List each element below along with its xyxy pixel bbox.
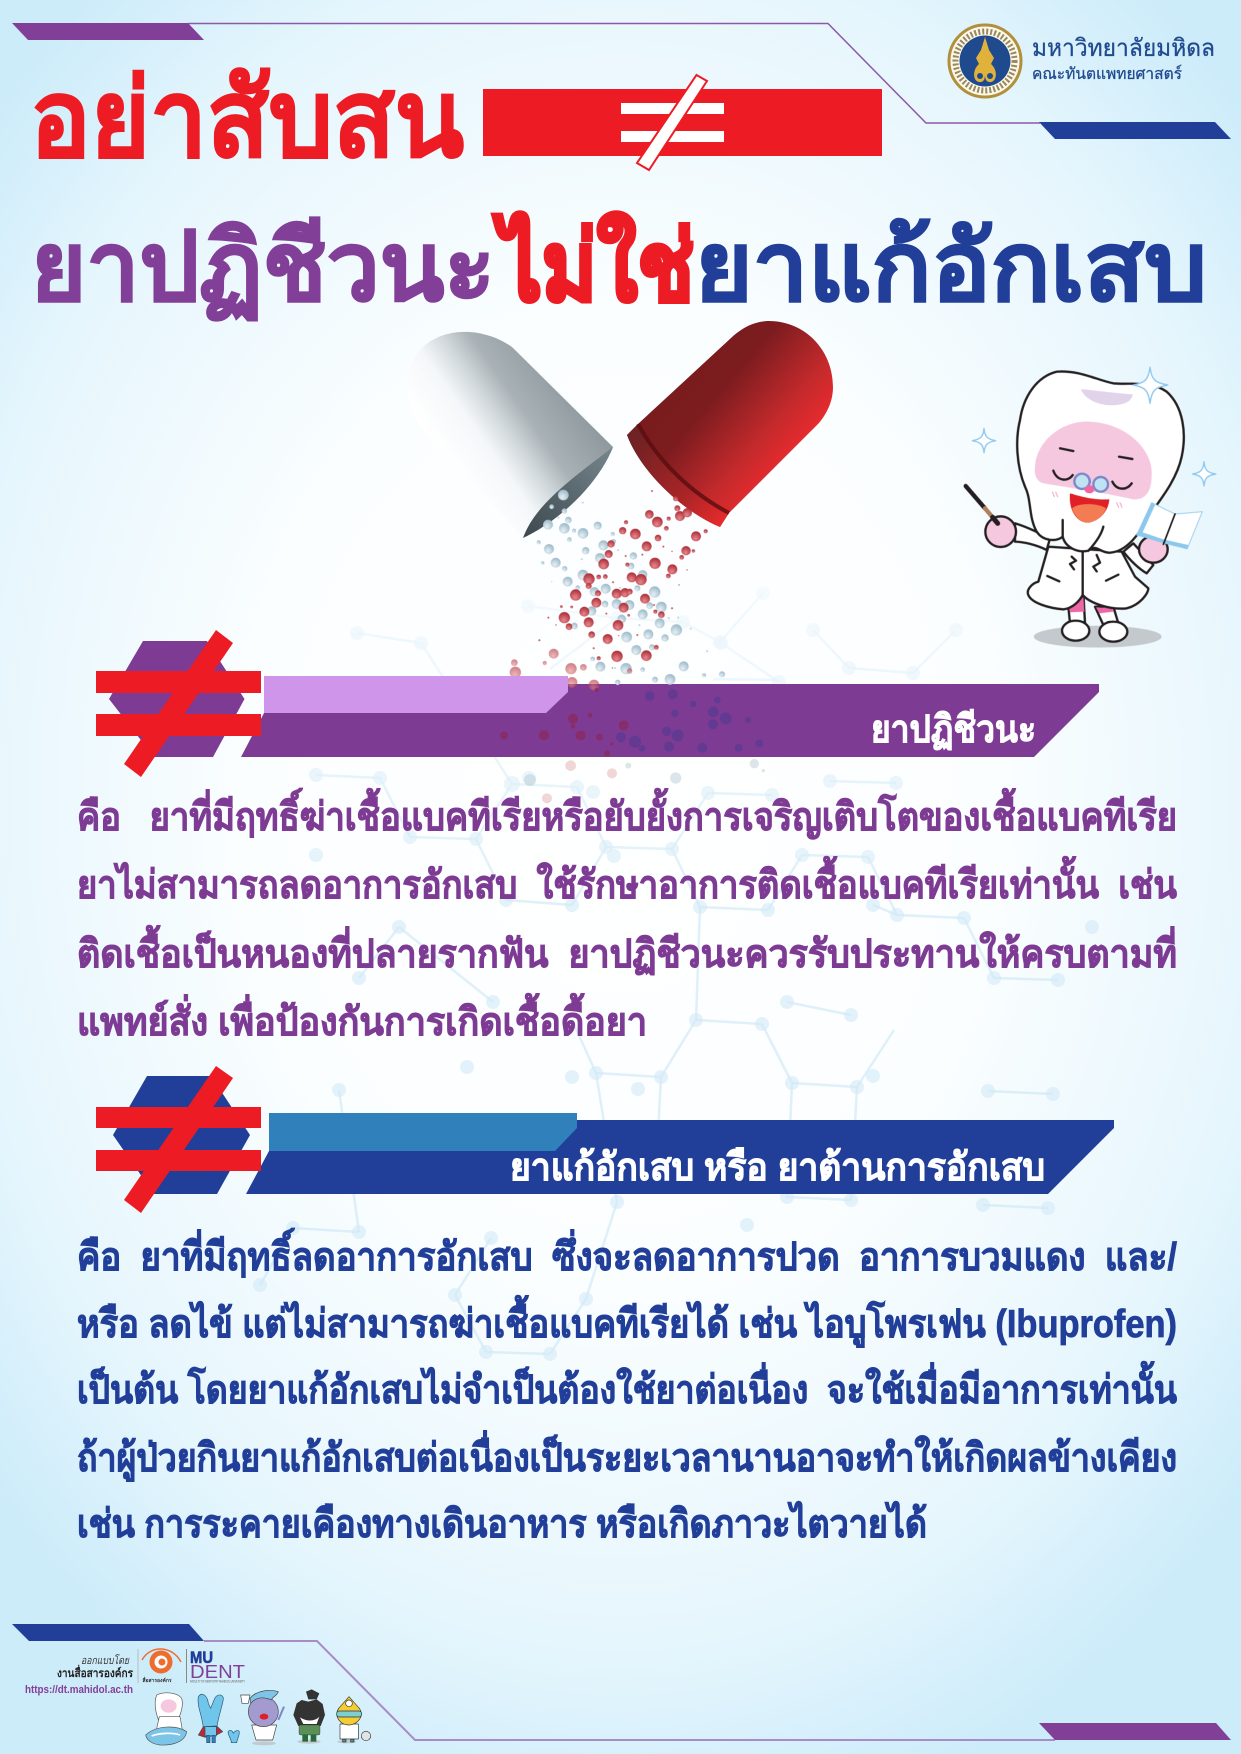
top frame with purple and blue tabs xyxy=(12,23,1231,139)
bottom frame with blue and purple tabs xyxy=(12,1624,1231,1740)
section 1 body text: ติดเชื้อเป็นหนองที่ปลายรากฟัน ยาปฏิชีวนะควรรับประทานให้ครบตามที่ xyxy=(77,925,1177,976)
footer designer credit: https://dt.mahidol.ac.th xyxy=(25,1684,133,1696)
footer logos: FACULTY OF DENTISTRY MAHIDOL UNIVERSITY xyxy=(190,1680,245,1684)
footer logos: DENT xyxy=(190,1662,245,1682)
subtitle: antibiotics are not anti-inflammatories: ยาปฏิชีวนะ xyxy=(31,214,495,322)
footer logos xyxy=(138,1648,245,1684)
footer designer credit: ออกแบบโดย xyxy=(81,1654,130,1667)
section 1 body text: แพทย์สั่ง เพื่อป้องกันการเกิดเชื้อดื้อยา xyxy=(77,993,647,1044)
university seal logo xyxy=(949,25,1021,97)
icon: red capsule half xyxy=(627,321,833,527)
footer logos: สื่อสารองค์กร xyxy=(142,1676,172,1684)
footer designer credit: งานสื่อสารองค์กร xyxy=(57,1664,134,1680)
section 2 blue header bar xyxy=(246,1120,1114,1194)
section 1 lilac tab xyxy=(264,676,568,713)
footer logos: MU xyxy=(190,1648,213,1667)
icon: tooth doctor mascot xyxy=(966,367,1216,648)
university name text: คณะทันตแพทยศาสตร์ xyxy=(1032,64,1182,83)
medicine particles xyxy=(500,490,765,803)
subtitle: antibiotics are not anti-inflammatories: ยาแก้อักเสบ xyxy=(695,214,1207,321)
subtitle: antibiotics are not anti-inflammatories xyxy=(31,212,1207,322)
section 1 purple header bar xyxy=(241,684,1099,757)
icon: white capsule half xyxy=(407,332,613,538)
section 2 heading: ยาแก้อักเสบ หรือ ยาต้านการอักเสบ xyxy=(510,1147,1045,1189)
section 1 not-equal badge xyxy=(96,630,261,777)
not-equal red banner xyxy=(483,75,882,170)
section 1 heading: ยาปฏิชีวนะ xyxy=(871,709,1036,751)
footer mascots xyxy=(146,1689,371,1745)
footer designer credit xyxy=(25,1654,134,1696)
section 2 body text: เช่น การระคายเคืองทางเดินอาหาร หรือเกิดภาวะไตวายได้ xyxy=(77,1501,927,1546)
section 1 body text xyxy=(77,787,1177,1044)
university name text xyxy=(1032,35,1215,83)
section 2 body text xyxy=(77,1227,1177,1546)
title: do not confuse: อย่าสับสน xyxy=(30,58,464,179)
background hexagon molecular network xyxy=(253,586,1099,1361)
subtitle: antibiotics are not anti-inflammatories: ไม่ใช่ xyxy=(492,212,694,321)
university name text: มหาวิทยาลัยมหิดล xyxy=(1032,35,1215,62)
section 2 blue tab xyxy=(269,1113,577,1151)
section 2 not-equal badge xyxy=(96,1066,261,1213)
